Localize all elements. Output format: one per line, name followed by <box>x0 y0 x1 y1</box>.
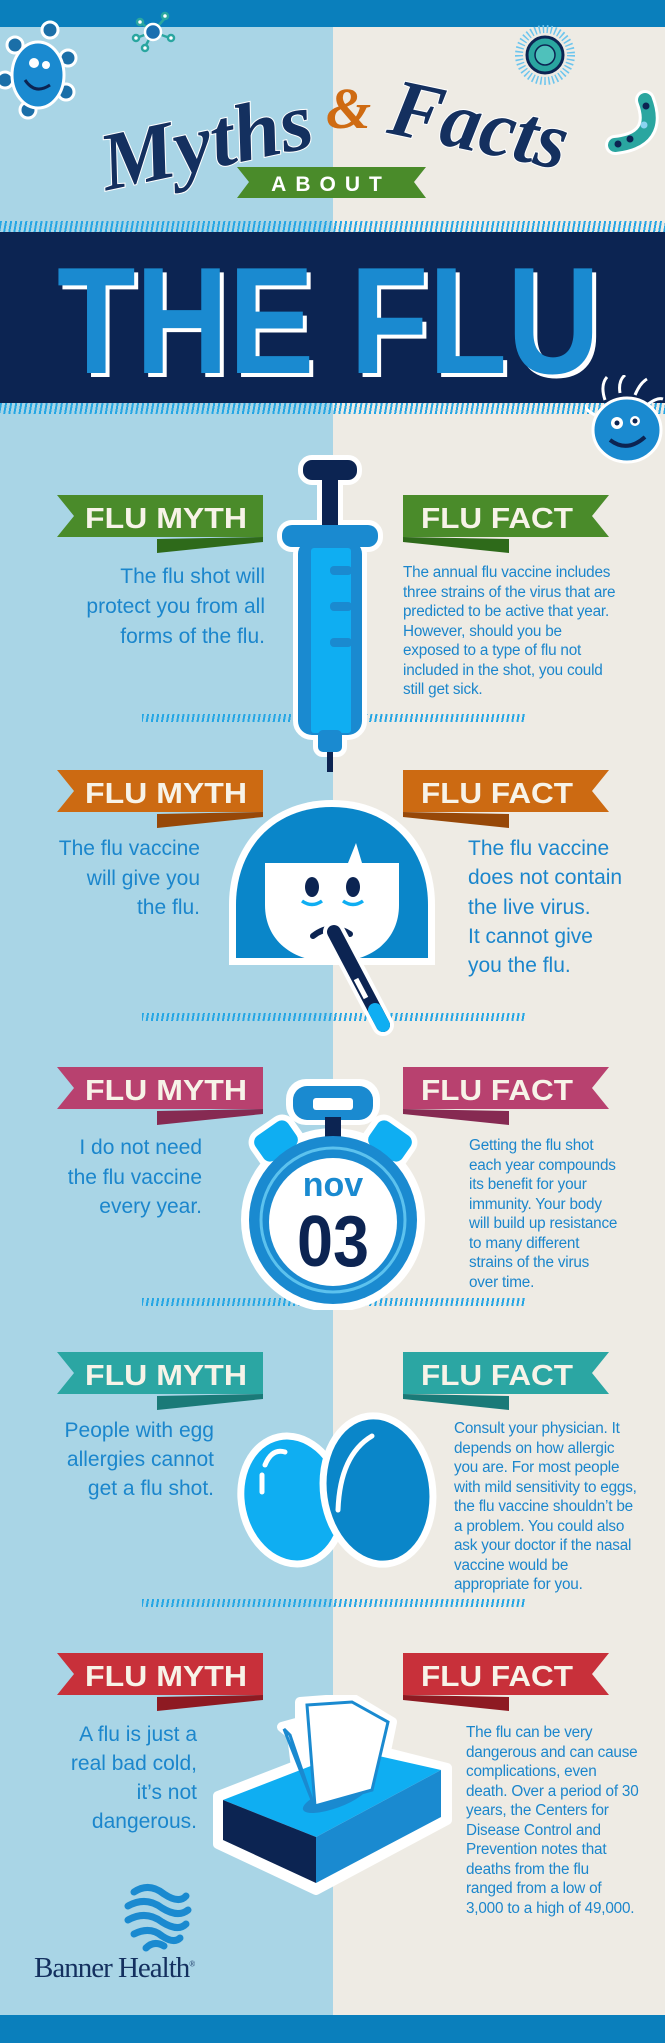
banner: flu fact 5: FLU FACT <box>421 1661 573 1693</box>
banner: flu fact 4: FLU FACT <box>421 1360 573 1392</box>
myth text 5: A flu is just a <box>79 1723 197 1746</box>
myth text 1: protect you from all <box>86 595 265 618</box>
fact text 5: deaths from the flu <box>466 1860 589 1878</box>
icon: syringe <box>277 455 383 772</box>
banner: ABOUT: ABOUT <box>271 173 391 196</box>
myth text 4: People with egg <box>65 1419 214 1442</box>
title: Myths & Facts: & <box>326 76 371 141</box>
banner: ABOUT <box>237 167 426 198</box>
fact text 4: vaccine would be <box>454 1556 568 1574</box>
myth text 4: allergies cannot <box>67 1448 214 1471</box>
banner: flu fact 5 <box>403 1653 609 1711</box>
myth text 5: it’s not <box>137 1781 197 1804</box>
myth text 3: the flu vaccine <box>68 1166 202 1188</box>
banner: flu fact 1 <box>403 495 609 553</box>
fact text 2 <box>468 837 622 977</box>
title: Myths & Facts <box>89 61 577 209</box>
fact text 4: appropriate for you. <box>454 1576 583 1593</box>
fact text 4: depends on how allergic <box>454 1440 614 1456</box>
icon: snowflake virus <box>133 13 174 51</box>
banner: flu myth 1 <box>57 495 263 553</box>
myth text 3: every year. <box>99 1195 202 1218</box>
icon: sick face with thermometer <box>229 800 435 1036</box>
fact text 5: Disease Control and <box>466 1822 601 1838</box>
myth text 4 <box>65 1419 214 1500</box>
fact text 4: a problem. You could also <box>454 1518 624 1534</box>
icon: teal bacterium <box>614 100 650 148</box>
fact text 1: exposed to a type of flu not <box>403 642 581 659</box>
fact text 3: each year compounds <box>469 1156 616 1174</box>
fact text 2: you the flu. <box>468 954 571 977</box>
banner: flu myth 1: FLU MYTH <box>85 503 247 535</box>
myth text 3 <box>68 1136 202 1218</box>
fact text 4: ask your doctor if the nasal <box>454 1537 631 1554</box>
myth text 2: The flu vaccine <box>59 837 200 860</box>
fact text 3: immunity. Your body <box>469 1196 602 1212</box>
fact text 5: death. Over a period of 30 <box>466 1782 639 1800</box>
fact text 3: will build up resistance <box>469 1215 617 1232</box>
icon: bottom right germ <box>585 375 664 464</box>
icon: left germ <box>0 22 76 118</box>
myth text 1: forms of the flu. <box>120 625 265 648</box>
logo: Banner Health <box>34 1884 195 1984</box>
icon: banner waves <box>124 1884 192 1952</box>
fact text 3 <box>469 1137 617 1290</box>
fact text 4: the flu vaccine shouldn’t be <box>454 1498 633 1515</box>
myth text 5 <box>71 1723 198 1833</box>
fact text 5 <box>466 1724 639 1916</box>
fact text 2: does not contain <box>468 866 622 889</box>
fact text 4: with mild sensitivity to eggs, <box>454 1478 637 1496</box>
title: Myths & Facts: Facts <box>381 61 577 188</box>
fact text 1: three strains of the virus that are <box>403 584 615 600</box>
banner: flu fact 4 <box>403 1352 609 1410</box>
banner: flu myth 2: FLU MYTH <box>85 778 247 810</box>
icon: tissue box <box>213 1695 452 1895</box>
banner: flu myth 5: FLU MYTH <box>85 1661 247 1693</box>
myth text 2: the flu. <box>137 896 200 919</box>
banner: flu fact 2 <box>403 770 609 828</box>
myth text 5: dangerous. <box>92 1810 197 1833</box>
banner: flu myth 5 <box>57 1653 263 1711</box>
fact text 5: Prevention notes that <box>466 1841 606 1858</box>
fact text 5: complications, even <box>466 1763 597 1780</box>
fact text 1: predicted to be active that year. <box>403 603 609 620</box>
banner: flu fact 3: FLU FACT <box>421 1075 573 1107</box>
fact text 5: ranged from a low of <box>466 1880 601 1897</box>
logo: Banner Health: Banner Health® <box>34 1952 194 1984</box>
banner: flu fact 1: FLU FACT <box>421 503 573 535</box>
fact text 3: its benefit for your <box>469 1176 587 1193</box>
myth text 2: will give you <box>87 866 200 890</box>
fact text 5: 3,000 to a high of 49,000. <box>466 1900 634 1916</box>
banner: flu fact 2: FLU FACT <box>421 778 573 810</box>
fact text 3: strains of the virus <box>469 1254 589 1271</box>
myth text 1: The flu shot will <box>120 565 265 588</box>
banner: flu myth 4 <box>57 1352 263 1410</box>
fact text 1: included in the shot, you could <box>403 662 603 678</box>
icon: stopwatch: nov <box>303 1166 363 1204</box>
fact text 3: to many different <box>469 1234 579 1252</box>
fact text 4: Consult your physician. It <box>454 1420 620 1437</box>
banner: flu myth 2 <box>57 770 263 828</box>
icon: stopwatch: 03 <box>297 1202 369 1282</box>
myth text 3: I do not need <box>79 1136 202 1159</box>
fact text 2: the live virus. <box>468 896 591 919</box>
fact text 5: years, the Centers for <box>466 1802 609 1819</box>
fact text 2: The flu vaccine <box>468 837 609 860</box>
icon: stopwatch <box>241 1079 425 1310</box>
myth text 2 <box>59 837 200 919</box>
myth text 5: real bad cold, <box>71 1752 197 1775</box>
title: Myths & Facts: Myths <box>89 74 321 209</box>
header decorations and title <box>0 12 659 209</box>
fact text 3: Getting the flu shot <box>469 1137 593 1154</box>
banner: flu myth 3: FLU MYTH <box>85 1075 247 1107</box>
fact text 1 <box>403 564 615 698</box>
icon: sun virus <box>519 29 571 81</box>
fact text 1: However, should you be <box>403 622 562 640</box>
banner: flu myth 4: FLU MYTH <box>85 1360 247 1392</box>
fact text 3: over time. <box>469 1274 534 1290</box>
fact text 5: The flu can be very <box>466 1724 592 1741</box>
myth text 1 <box>86 565 265 648</box>
fact text 5: dangerous and can cause <box>466 1744 637 1760</box>
fact text 2: It cannot give <box>468 925 593 948</box>
fact text 4: you are. For most people <box>454 1459 619 1476</box>
fact text 4 <box>454 1420 637 1593</box>
fact text 1: The annual flu vaccine includes <box>403 564 610 581</box>
bottom bar <box>0 2015 665 2043</box>
icon: eggs <box>237 1412 436 1568</box>
fact text 1: still get sick. <box>403 681 482 698</box>
top bar <box>0 0 665 27</box>
banner: flu myth 3 <box>57 1067 263 1125</box>
myth text 4: get a flu shot. <box>88 1477 214 1500</box>
banner: flu fact 3 <box>403 1067 609 1125</box>
